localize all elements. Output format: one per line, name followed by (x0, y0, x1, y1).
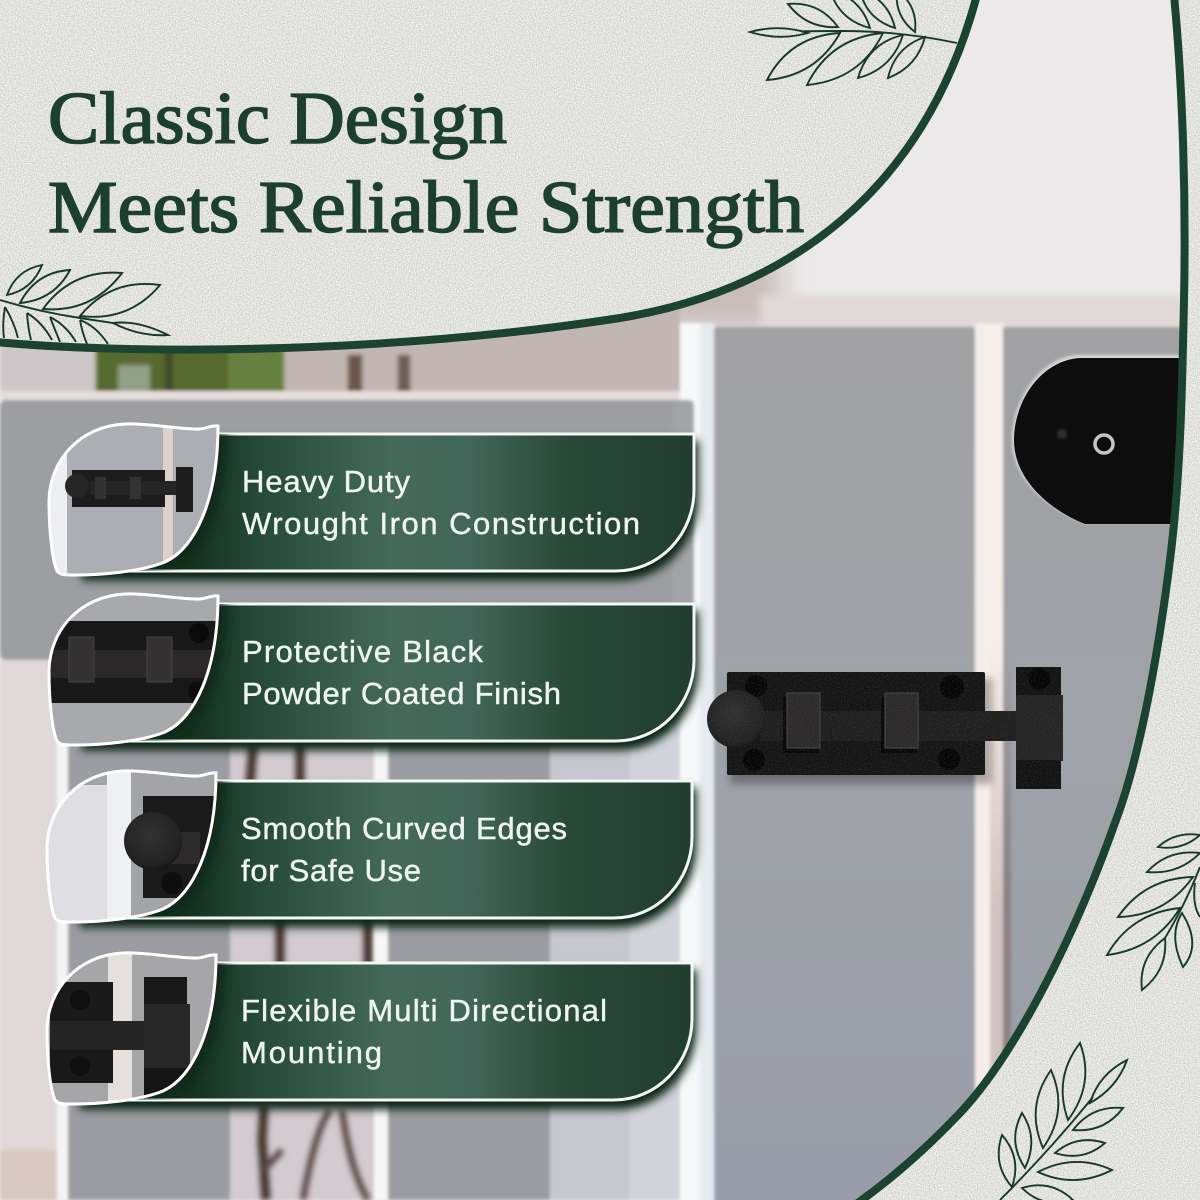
card 2 text: Powder Coated Finish (242, 676, 561, 711)
card 2 text: Protective Black (242, 634, 484, 669)
main iron barrel bolt latch (707, 667, 1063, 789)
card 4 green banner (78, 963, 692, 1100)
card 4: multi directional mounting (45, 945, 692, 1110)
card 2 leaf shadow (138, 604, 236, 741)
latch knob (707, 690, 765, 748)
card 3 text (241, 811, 567, 888)
latch sliding bolt (760, 711, 1022, 741)
card 3 text: Smooth Curved Edges (241, 811, 567, 846)
latch back plate (727, 672, 985, 775)
card 3 photo: knob (46, 769, 218, 924)
card 3 green banner (78, 781, 692, 918)
card 2 photo: close-up plate (45, 590, 225, 750)
title: Classic Design (48, 78, 507, 160)
card 4 text: Mounting (241, 1035, 382, 1070)
card 2 green banner (80, 604, 694, 741)
icon: leaf sprig top right (750, 0, 957, 85)
card 1 text: Heavy Duty (242, 464, 410, 499)
card 3: curved edges (45, 765, 692, 930)
icon: leaf sprig bottom right (999, 1043, 1127, 1200)
card 4 text (241, 993, 607, 1070)
title: Meets Reliable Strength (48, 167, 804, 249)
panel: top textured curve (0, 0, 1000, 360)
top plate on the right picket (1012, 355, 1200, 524)
card 1 green banner (80, 434, 694, 571)
card 1 text (242, 464, 640, 541)
card 1 photo: whole latch (45, 420, 225, 580)
card 2: powder coated (45, 590, 694, 750)
card 4 photo: bolt and keeper (46, 951, 218, 1106)
card 1 text: Wrought Iron Construction (242, 506, 640, 541)
latch keeper (1016, 667, 1063, 789)
panel: right textured curve (840, 0, 1200, 1200)
card 4 leaf shadow (136, 963, 234, 1100)
icon: leaf sprig right (1107, 834, 1200, 990)
card 4 text: Flexible Multi Directional (241, 993, 607, 1028)
icon: leaf sprig left (0, 265, 168, 344)
title (48, 78, 804, 249)
card 2 text (242, 634, 561, 711)
card 1: heavy duty (45, 420, 694, 580)
card 1 leaf shadow (138, 434, 236, 571)
card 3 text: for Safe Use (241, 853, 421, 888)
card 3 leaf shadow (136, 781, 234, 918)
